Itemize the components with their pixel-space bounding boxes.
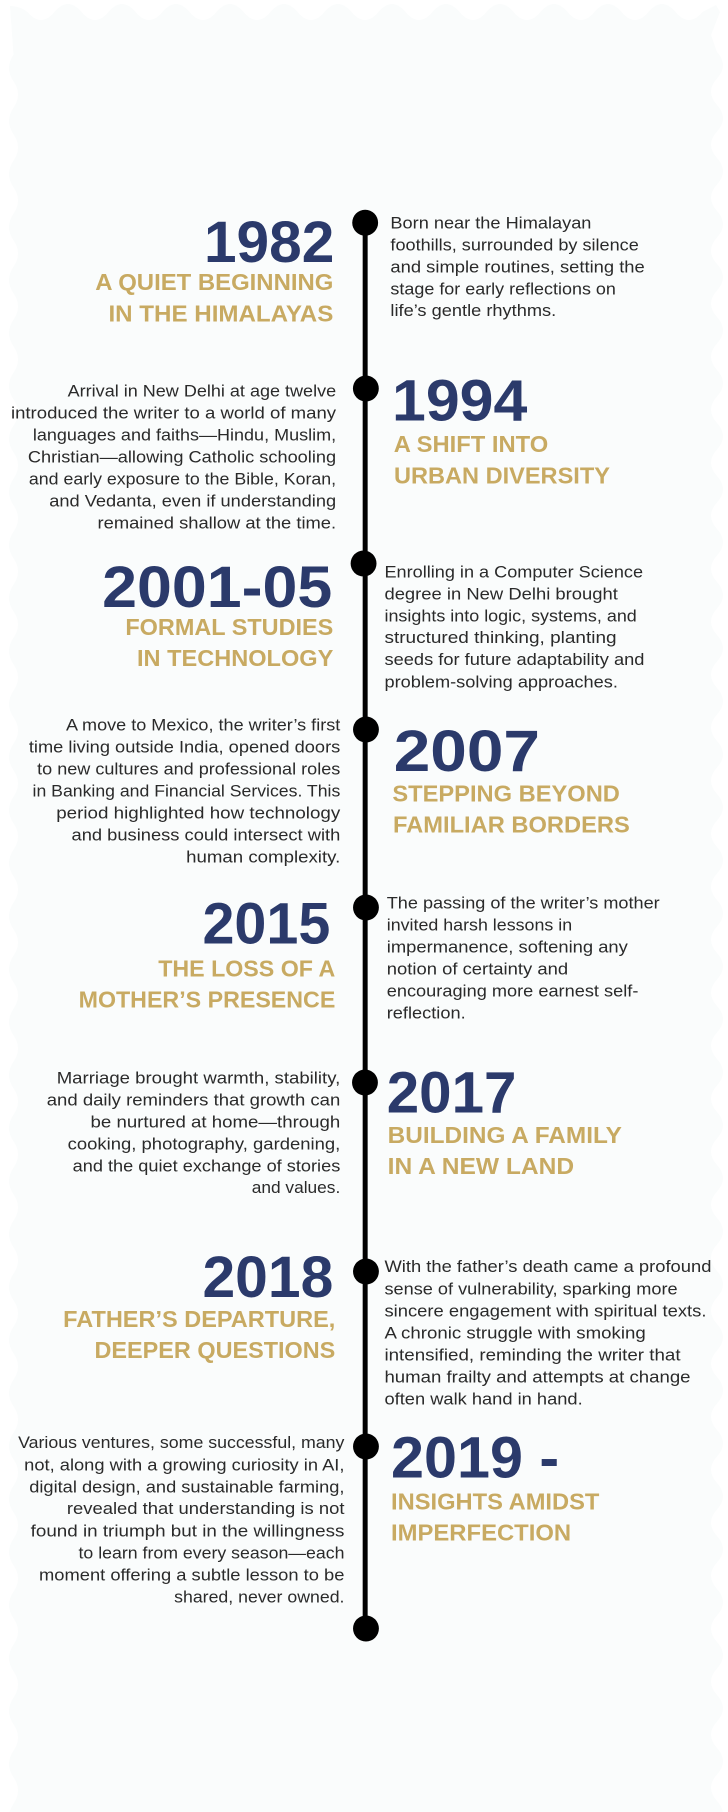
heading 2017 <box>388 1122 622 1179</box>
description 2001-05: insights into logic, systems, and <box>384 606 637 625</box>
description 1982 <box>390 213 645 320</box>
description 2007: period highlighted how technology <box>56 803 341 823</box>
description 2019: revealed that understanding is not <box>67 1499 345 1518</box>
heading 2001-05: FORMAL STUDIES <box>125 614 333 640</box>
timeline: vertical line and dots <box>351 210 379 1642</box>
description 2007: time living outside India, opened doors <box>29 738 340 757</box>
description 2007: human complexity. <box>186 847 340 867</box>
description 2007: and business could intersect with <box>72 825 340 844</box>
description 2017: and values. <box>252 1178 340 1197</box>
description 2001-05: degree in New Delhi brought <box>384 584 618 603</box>
heading 2018: FATHER’S DEPARTURE, <box>63 1306 335 1332</box>
heading 2015: MOTHER’S PRESENCE <box>79 987 335 1013</box>
description 2015: The passing of the writer’s mother <box>387 893 660 913</box>
heading 1994: URBAN DIVERSITY <box>394 462 610 488</box>
description 2018: human frailty and attempts at change <box>384 1368 691 1387</box>
description 1994 <box>11 381 337 533</box>
entry: 2018 <box>63 1246 711 1409</box>
heading 2007: FAMILIAR BORDERS <box>393 811 630 837</box>
entry: 2015 <box>79 892 660 1022</box>
entry: 2017 <box>47 1061 622 1197</box>
description 2018: A chronic struggle with smoking <box>384 1324 646 1343</box>
heading 2017: BUILDING A FAMILY <box>388 1122 622 1148</box>
description 1994: Arrival in New Delhi at age twelve <box>68 381 336 401</box>
description 2007 <box>29 715 341 867</box>
description 2015: invited harsh lessons in <box>387 915 572 934</box>
description 2015: encouraging more earnest self- <box>387 981 638 1001</box>
description 2015: reflection. <box>387 1003 466 1022</box>
heading 2019: INSIGHTS AMIDST <box>391 1488 599 1515</box>
heading 1982: IN THE HIMALAYAS <box>108 300 333 327</box>
description 2017 <box>47 1068 340 1197</box>
dot 2019 <box>353 1434 379 1460</box>
description 2001-05: structured thinking, planting <box>384 628 617 647</box>
year 2019: 2019 - <box>391 1426 559 1491</box>
description 2019 <box>18 1433 345 1606</box>
timeline content <box>11 210 711 1642</box>
description 2015: notion of certainty and <box>387 959 568 978</box>
entry: 2001-05 <box>102 556 644 691</box>
description 2007: to new cultures and professional roles <box>37 759 340 779</box>
description 2019: found in triumph but in the willingness <box>31 1521 344 1541</box>
description 1994: Christian—allowing Catholic schooling <box>28 447 336 466</box>
description 2001-05: Enrolling in a Computer Science <box>384 562 643 582</box>
description 2015 <box>387 893 660 1022</box>
heading 2019 <box>391 1488 599 1545</box>
dot 2001 <box>351 550 377 576</box>
dot 1982 <box>352 210 378 236</box>
dot 2015 <box>353 894 379 920</box>
description 2018: With the father’s death came a profound <box>384 1257 711 1276</box>
description 1982: Born near the Himalayan <box>390 213 591 233</box>
description 2001-05 <box>384 562 644 691</box>
heading 1982: A QUIET BEGINNING <box>95 269 333 295</box>
description 2018: often walk hand in hand. <box>384 1389 583 1409</box>
heading 1982 <box>95 269 333 327</box>
description 2019: moment offering a subtle lesson to be <box>39 1566 344 1585</box>
description 2017: and daily reminders that growth can <box>47 1090 340 1110</box>
heading 2015: THE LOSS OF A <box>158 956 335 982</box>
description 2015: impermanence, softening any <box>387 937 629 957</box>
heading 2001-05: IN TECHNOLOGY <box>137 645 334 671</box>
entry: 1982 <box>95 211 645 327</box>
dot 2017 <box>352 1070 378 1096</box>
description 2018: sense of vulnerability, sparking more <box>384 1279 678 1299</box>
description 2007: A move to Mexico, the writer’s first <box>66 715 341 735</box>
heading 1994 <box>394 431 610 488</box>
year 1994: 1994 <box>392 369 527 434</box>
heading 2015 <box>79 956 335 1013</box>
description 1994: languages and faiths—Hindu, Muslim, <box>33 425 336 445</box>
description 2017: be nurtured at home—through <box>91 1112 340 1131</box>
description 2001-05: seeds for future adaptability and <box>384 650 644 669</box>
heading 2018 <box>63 1306 335 1363</box>
description 1982: life’s gentle rhythms. <box>390 301 556 320</box>
description 2018: sincere engagement with spiritual texts. <box>384 1301 706 1320</box>
description 2007: in Banking and Financial Services. This <box>33 781 340 800</box>
dot 2007 <box>353 716 379 742</box>
heading 1994: A SHIFT INTO <box>394 431 548 457</box>
entry: 2019 <box>18 1426 599 1606</box>
description 1982: foothills, surrounded by silence <box>390 235 639 254</box>
description 2018 <box>384 1257 711 1409</box>
year 2015: 2015 <box>202 892 330 956</box>
heading 2007 <box>392 780 630 837</box>
description 2001-05: problem-solving approaches. <box>384 672 618 691</box>
end dot <box>353 1616 379 1642</box>
year 2017: 2017 <box>387 1061 516 1125</box>
description 2019: shared, never owned. <box>174 1587 344 1606</box>
heading 2019: IMPERFECTION <box>391 1519 571 1545</box>
entry: 1994 <box>11 369 610 533</box>
description 1994: introduced the writer to a world of many <box>11 403 337 422</box>
description 2019: Various ventures, some successful, many <box>18 1433 345 1452</box>
description 2017: Marriage brought warmth, stability, <box>57 1068 340 1087</box>
description 2019: to learn from every season—each <box>79 1543 344 1562</box>
description 1994: and early exposure to the Bible, Koran, <box>29 469 336 489</box>
description 2018: intensified, reminding the writer that <box>384 1345 681 1364</box>
year 2018: 2018 <box>202 1246 333 1310</box>
description 2017: and the quiet exchange of stories <box>73 1156 340 1175</box>
description 1994: and Vedanta, even if understanding <box>49 491 336 510</box>
year 1982: 1982 <box>204 211 334 275</box>
description 1982: and simple routines, setting the <box>390 257 645 277</box>
description 2019: digital design, and sustainable farming, <box>29 1477 344 1496</box>
dot 2018 <box>353 1258 379 1284</box>
description 2019: not, along with a growing curiosity in AI, <box>24 1455 344 1475</box>
dot 1994 <box>353 376 379 402</box>
heading 2017: IN A NEW LAND <box>388 1153 574 1179</box>
heading 2001-05 <box>125 614 334 671</box>
description 2017: cooking, photography, gardening, <box>68 1135 340 1154</box>
description 1994: remained shallow at the time. <box>98 513 336 533</box>
heading 2018: DEEPER QUESTIONS <box>95 1337 335 1363</box>
year 2001-05: 2001-05 <box>102 556 332 620</box>
entry: 2007 <box>29 715 630 867</box>
year 2007: 2007 <box>394 720 540 784</box>
description 1982: stage for early reflections on <box>390 279 616 298</box>
heading 2007: STEPPING BEYOND <box>392 780 620 806</box>
